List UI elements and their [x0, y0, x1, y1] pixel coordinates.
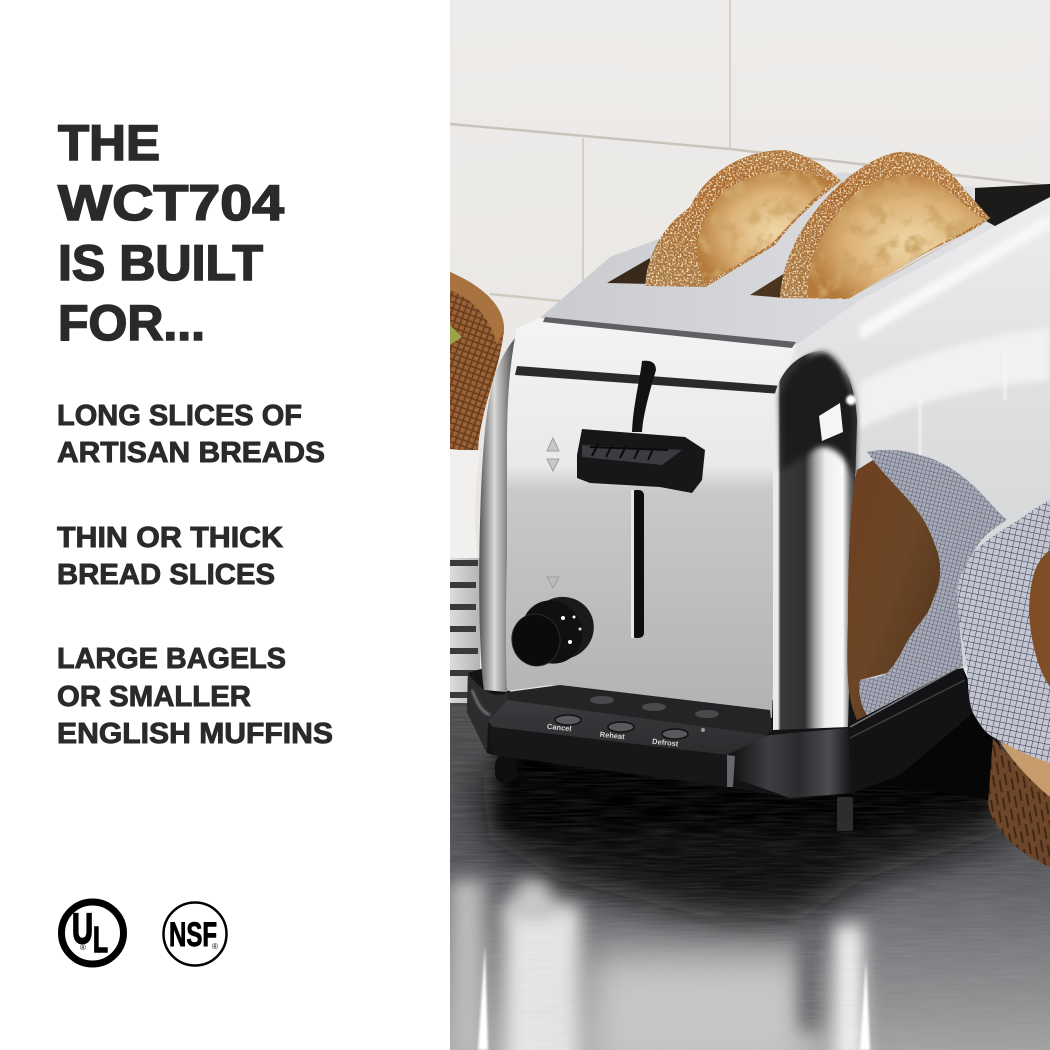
reflected bread loaf: [847, 460, 940, 720]
panel: product photo: [450, 0, 1050, 1050]
toast slices: [645, 150, 990, 299]
text block: bread slices: BREAD SLICES: [57, 559, 275, 591]
wooden board: [988, 738, 1050, 867]
icon: NSF certification mark: [164, 902, 226, 966]
icon: UL certification mark: ®: [80, 943, 86, 952]
text block: artisan breads: [57, 400, 325, 469]
chrome left edge: [479, 318, 540, 692]
panel: text column: [0, 0, 450, 1050]
text block: bagels and muffins: ENGLISH MUFFINS: [57, 718, 333, 750]
front chrome panel: [507, 317, 796, 718]
browning dial: [511, 596, 594, 666]
text block: artisan breads: ARTISAN BREADS: [57, 437, 325, 469]
tile wall: [450, 0, 1050, 760]
slice two: [780, 152, 990, 299]
stacked plates: [450, 449, 480, 704]
icon: NSF certification mark: ®: [212, 942, 218, 951]
icon: UL certification mark: L: [93, 919, 108, 960]
text block: bagels and muffins: LARGE BAGELS: [57, 643, 286, 675]
left towel: [859, 450, 1007, 715]
toaster feet: [495, 755, 853, 831]
control buttons: Defrost: [652, 737, 679, 748]
text block: bagels and muffins: OR SMALLER: [57, 681, 251, 713]
control buttons: Reheat: [599, 730, 626, 741]
icon: UL certification mark: U: [72, 905, 93, 953]
text block: artisan breads: LONG SLICES OF: [57, 400, 302, 432]
arrow: dial indicator: [547, 577, 559, 588]
control buttons: [547, 696, 719, 748]
heading: THE: [58, 115, 160, 171]
arrows: lever direction: [547, 438, 559, 471]
heading: WCT704: [58, 175, 284, 231]
lever stem: [632, 361, 656, 432]
lever track: [634, 490, 644, 638]
text block: bread slices: [57, 522, 283, 591]
control tray: [488, 685, 772, 787]
lever: [577, 361, 705, 638]
right towel and bread: [957, 500, 1050, 763]
toaster side panel: [796, 214, 1050, 680]
icon: UL certification mark: [62, 902, 124, 964]
shadow behind towels: [873, 668, 1000, 800]
text block: bagels and muffins: [57, 643, 333, 750]
chrome corner column: [773, 350, 857, 730]
text block: bread slices: THIN OR THICK: [57, 522, 283, 554]
heading: FOR...: [58, 295, 205, 351]
slice one: [645, 150, 841, 287]
slots and top face: [540, 172, 1050, 345]
heading: [58, 115, 284, 351]
heading: IS BUILT: [58, 235, 263, 291]
lever handle: [577, 429, 705, 493]
wicker basket: [450, 272, 504, 450]
steel counter: [450, 703, 1050, 1050]
icon: NSF certification mark: NSF: [169, 916, 217, 954]
toaster base: [467, 665, 973, 798]
control buttons: Cancel: [547, 722, 572, 733]
